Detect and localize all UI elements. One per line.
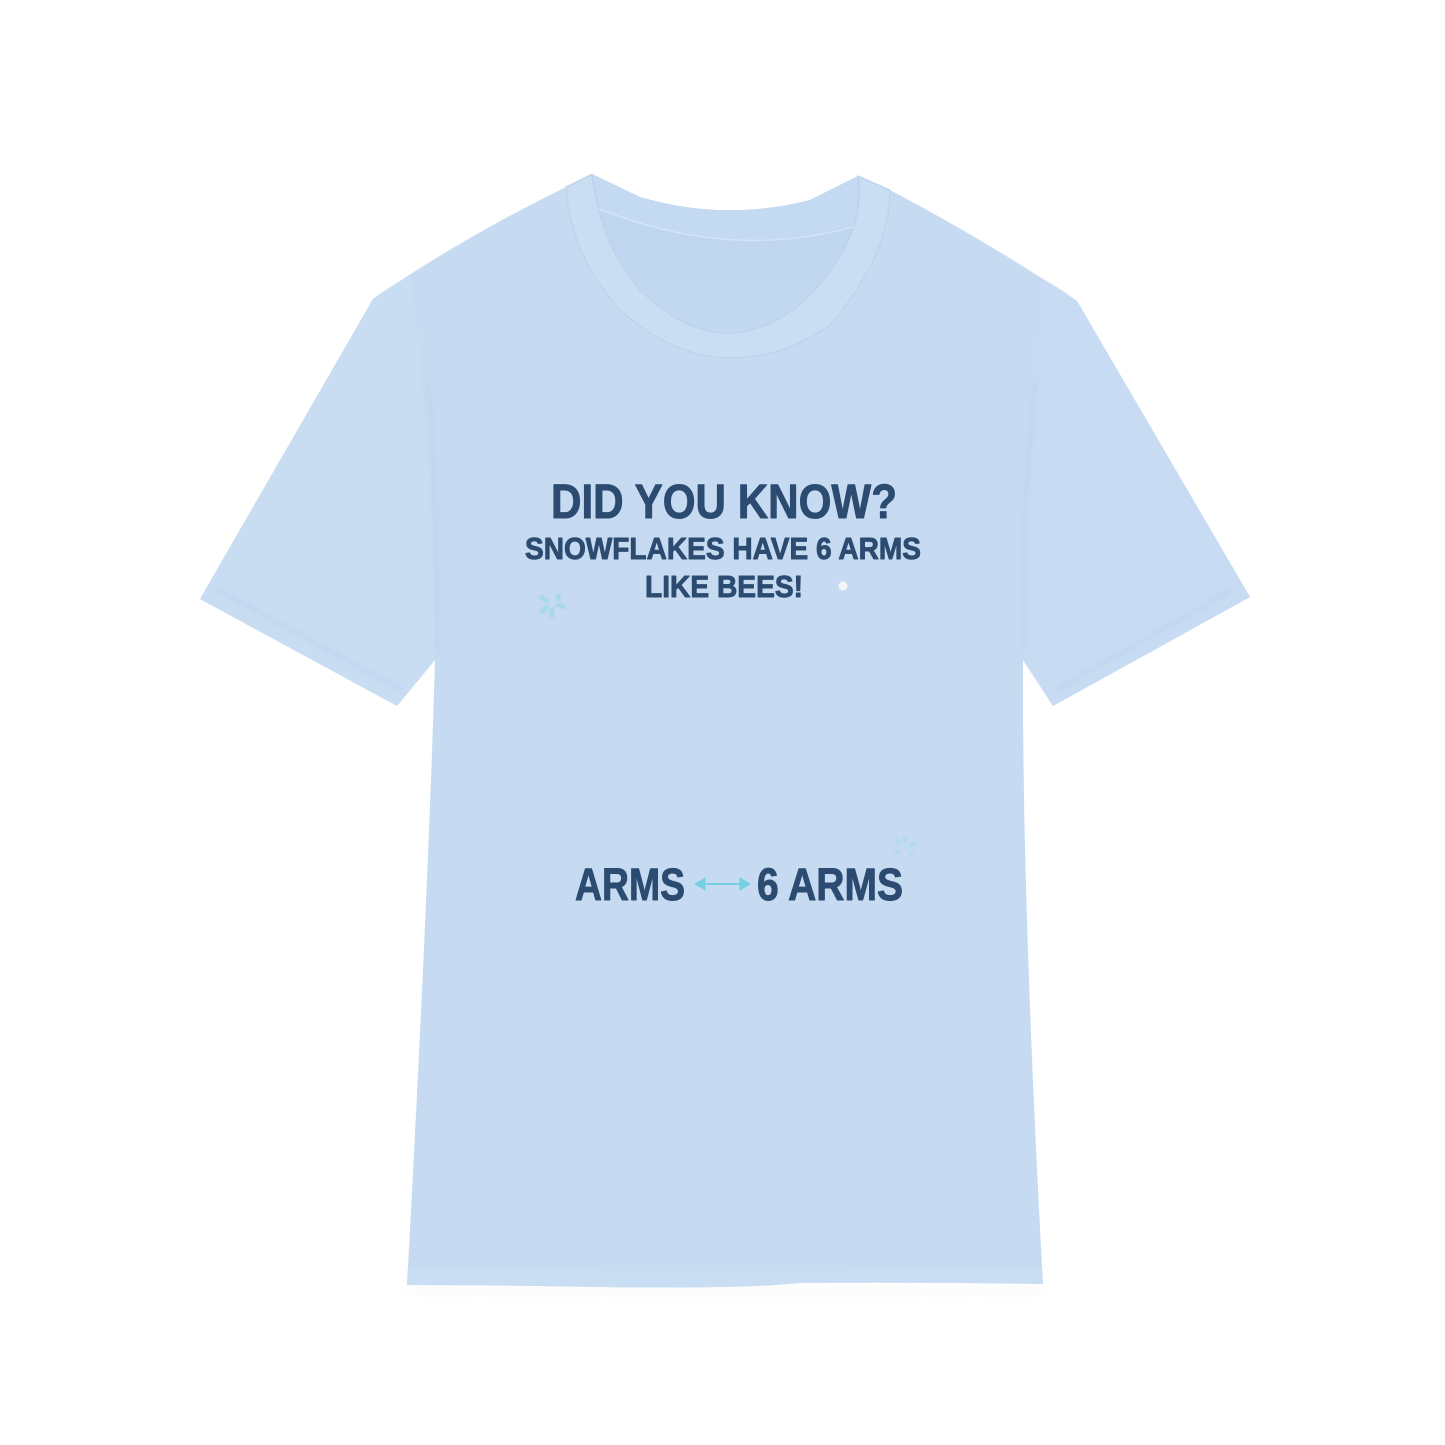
right label: 6 ARMS [757,859,903,910]
neck opening [592,174,859,333]
subtitle line 2: LIKE BEES! [645,569,803,604]
front collar rib [566,174,890,358]
icon: snowflake sparkle left [541,595,564,616]
icon: snowflake sparkle right [895,838,915,857]
back collar band [592,174,858,240]
white dot [838,582,848,590]
t-shirt [200,174,1250,1295]
left label: ARMS [575,859,685,910]
sleeve and body shading [218,380,1232,690]
left sleeve panel [200,276,435,706]
subtitle line 1: SNOWFLAKES HAVE 6 ARMS [525,531,921,566]
soft drop shadow under hem [410,1288,1042,1295]
title: DID YOU KNOW? [551,476,897,529]
hem band [407,1268,1043,1288]
double-headed arrow [695,878,750,890]
shirt body and sleeves [200,174,1250,1288]
right sleeve panel [1023,280,1250,706]
